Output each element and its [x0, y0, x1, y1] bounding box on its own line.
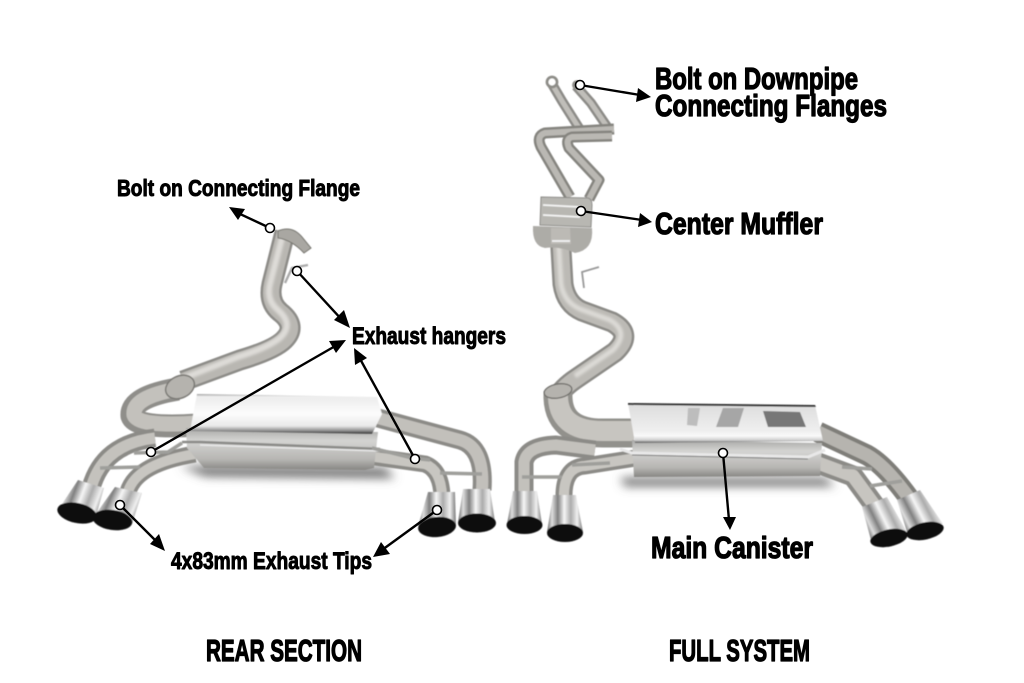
full system hanger brackets — [522, 463, 902, 486]
leader arrow to right hanger — [359, 357, 415, 459]
rear muffler strap — [182, 442, 380, 449]
leader arrow — [580, 85, 640, 95]
leader arrow — [238, 213, 270, 228]
rear hanger brackets — [100, 443, 482, 474]
label: Main Canister — [651, 530, 813, 565]
label: Bolt on Connecting Flange — [117, 175, 360, 201]
label: Exhaust hangers — [352, 323, 506, 350]
exhaust illustration: rear section — [55, 229, 496, 539]
leader arrow — [581, 211, 642, 220]
canister reflections — [763, 411, 806, 427]
heading: full system: FULL SYSTEM — [669, 633, 810, 668]
main canister strap — [620, 449, 825, 457]
rear muffler upper body — [190, 394, 382, 434]
pipe clamp ring — [162, 371, 198, 403]
main canister lower body — [632, 440, 822, 477]
label: Center Muffler — [655, 206, 823, 241]
callout: bolt on downpipe connecting flanges: Connecting Flanges — [655, 88, 887, 123]
center muffler body — [540, 197, 592, 227]
outlet pipes — [524, 432, 909, 506]
twin downpipes — [539, 84, 614, 199]
connecting pipe from flange to bend — [183, 232, 290, 381]
label: 4x83mm Exhaust Tips — [171, 548, 372, 575]
rear tips — [55, 480, 496, 539]
mid pipe collar — [551, 228, 571, 244]
outlet pipes to tips — [91, 418, 482, 496]
callout: bolt on downpipe connecting flanges — [576, 61, 887, 123]
leader arrow — [723, 453, 729, 520]
callout: exhaust hangers — [146, 266, 506, 464]
center muffler lower ovals — [533, 226, 592, 253]
callout: main canister — [651, 448, 813, 565]
leader arrow to left tip — [120, 505, 158, 543]
soft shadow under main canister — [620, 478, 835, 486]
rear exhaust hanger — [285, 265, 308, 283]
downpipe flanges — [547, 77, 557, 87]
exhaust illustration: full system — [506, 77, 945, 550]
main canister upper polished face — [628, 403, 823, 443]
rear muffler lower body — [186, 428, 378, 470]
rear flange — [278, 229, 311, 253]
leader arrow to upper hanger — [297, 271, 343, 321]
long mid pipe — [557, 232, 624, 398]
callout: bolt on connecting flange — [117, 175, 360, 232]
soft shadow under rear muffler — [180, 466, 395, 478]
rear bend into canister — [558, 392, 634, 433]
leader arrow to left hanger — [151, 345, 337, 452]
label: Bolt on Downpipe — [655, 61, 858, 96]
U-bend pipe into muffler — [132, 389, 198, 426]
heading: rear section: REAR SECTION — [206, 633, 362, 668]
leader arrow to right tip — [382, 510, 437, 550]
full system tips — [506, 490, 945, 550]
callout: center muffler — [576, 206, 823, 241]
mid pipe hanger — [582, 267, 599, 288]
pipe clamp ring — [543, 382, 573, 400]
callout: exhaust tips — [116, 500, 442, 575]
